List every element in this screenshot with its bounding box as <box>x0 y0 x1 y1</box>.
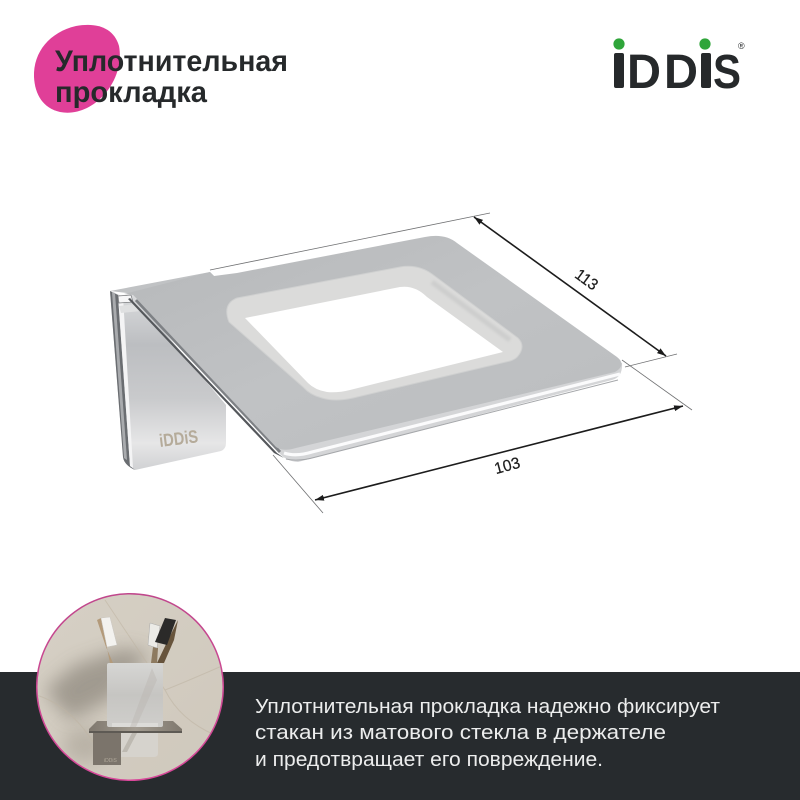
dimension lines <box>210 213 692 513</box>
product: wall mount <box>110 291 226 470</box>
description text: стакан из матового стекла в держателе <box>255 722 666 744</box>
description text <box>255 696 720 771</box>
small mount <box>93 733 121 765</box>
frosted glass lower part <box>121 733 158 757</box>
dimension label: 103: 103 <box>493 455 522 478</box>
description text: и предотвращает его повреждение. <box>255 749 603 771</box>
title: прокладка <box>55 76 207 109</box>
product: plate with gasket <box>110 236 622 462</box>
title <box>55 45 288 109</box>
frosted glass <box>107 663 163 727</box>
photo: iDDiS <box>104 758 117 764</box>
description text: Уплотнительная прокладка надежно фиксирует <box>255 696 720 718</box>
wall shadow <box>45 648 150 720</box>
logo: iddis <box>613 38 745 99</box>
logo: iddis: S <box>713 46 741 99</box>
logo: iddis: D <box>627 46 661 99</box>
dimension label: 113: 113 <box>571 266 601 294</box>
gasket frame <box>227 266 522 400</box>
photo <box>36 593 226 783</box>
mount logo: iDDiS <box>158 426 199 451</box>
title: Уплотнительная <box>55 45 288 78</box>
logo: iddis: D <box>664 46 698 99</box>
pink blob <box>34 25 120 113</box>
dark band <box>0 672 800 800</box>
chrome edge <box>131 295 622 462</box>
window opening <box>245 287 503 392</box>
toothbrushes <box>97 617 178 663</box>
shelf <box>89 721 182 731</box>
logo: iddis: ® <box>738 41 745 51</box>
